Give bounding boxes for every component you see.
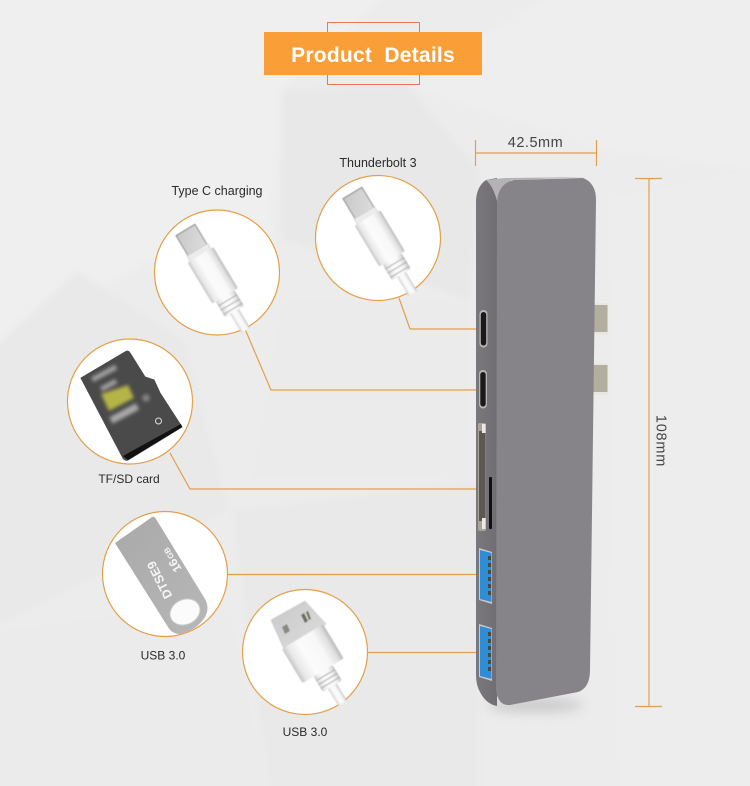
callout: usb 3.0 flash drive: USB 3.0 bbox=[141, 648, 186, 662]
callout: type c charging bbox=[154, 184, 280, 338]
callout: type c charging: Type C charging bbox=[171, 184, 263, 198]
icon: usb flash drive bbox=[115, 517, 208, 634]
usb port 2 bbox=[479, 624, 492, 681]
hub device bbox=[476, 177, 608, 712]
front face bbox=[496, 178, 596, 705]
infographic canvas bbox=[66, 22, 666, 736]
sd slot bbox=[478, 423, 486, 531]
icon: usb-c cable bbox=[340, 185, 426, 301]
usb port 1 bbox=[479, 548, 492, 604]
icon: usb flash drive: DTSE9 bbox=[144, 559, 175, 601]
usb-c plugs bbox=[593, 303, 608, 395]
connector lines bbox=[170, 298, 480, 652]
callout: usb 3.0 cable bbox=[242, 590, 368, 739]
top bevel bbox=[486, 177, 587, 201]
callout: thunderbolt 3 bbox=[316, 156, 440, 301]
side edge bbox=[476, 178, 497, 706]
icon: usb flash drive: 16GB bbox=[159, 545, 185, 575]
dimension: width: 42.5mm bbox=[508, 135, 563, 151]
title banner bbox=[264, 22, 482, 84]
callout: usb 3.0 flash drive bbox=[102, 512, 228, 662]
shadow bbox=[487, 698, 583, 712]
callout: tf/sd card bbox=[68, 339, 192, 486]
tf slot bbox=[489, 477, 492, 529]
dimension: height bbox=[635, 178, 668, 707]
thunderbolt port bbox=[480, 310, 488, 348]
title banner: Product Details bbox=[291, 44, 455, 67]
icon: usb-c cable bbox=[173, 222, 259, 338]
type c port bbox=[479, 370, 487, 408]
dimension: height: 108mm bbox=[652, 415, 668, 467]
callout: usb 3.0 cable: USB 3.0 bbox=[283, 725, 328, 739]
callout: tf/sd card: TF/SD card bbox=[98, 472, 160, 486]
icon: usb-a cable bbox=[271, 601, 363, 716]
dimension: width bbox=[475, 135, 597, 166]
icon: memory card bbox=[81, 351, 182, 460]
callout: thunderbolt 3: Thunderbolt 3 bbox=[339, 156, 417, 170]
